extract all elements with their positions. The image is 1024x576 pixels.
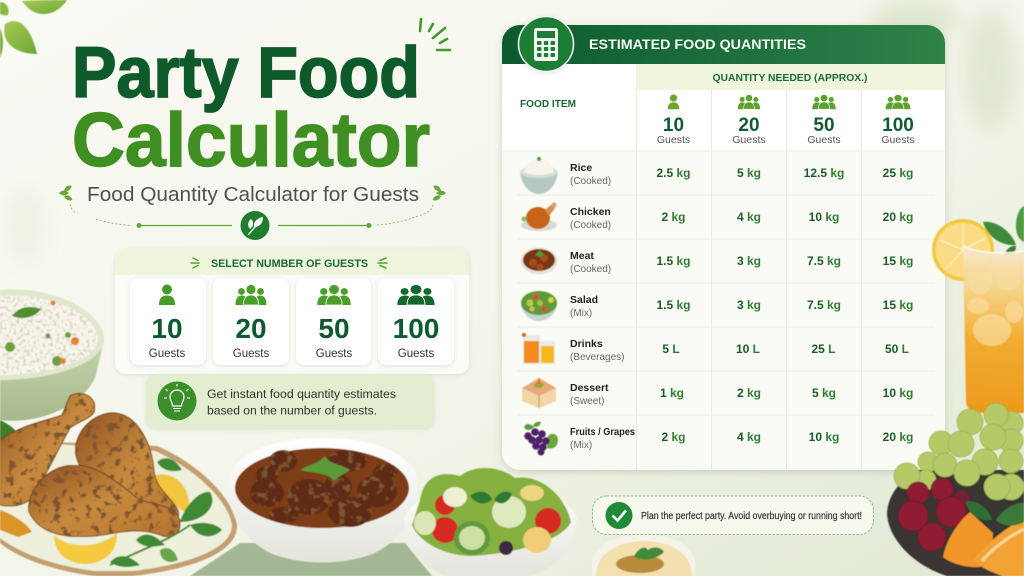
column heading: 20 guests: 20 <box>738 115 760 136</box>
photo: dip bowl <box>592 535 695 576</box>
row: dessert <box>522 377 913 408</box>
table head background <box>502 64 945 151</box>
row: chicken: Chicken <box>570 206 611 218</box>
row: salad: 3 kg <box>737 298 761 312</box>
row: meat: (Cooked) <box>570 264 611 275</box>
row: meat: Meat <box>570 250 594 262</box>
herbs <box>110 492 222 567</box>
title line: Calculator: Calculator <box>72 98 430 183</box>
heading: SELECT NUMBER OF GUESTS <box>211 258 369 270</box>
row: meat: 3 kg <box>737 254 761 268</box>
column heading: 20 guests <box>732 95 766 146</box>
icon: drinks <box>522 333 555 364</box>
column heading: 100 guests: Guests <box>881 134 915 146</box>
icon: light bulb <box>158 382 196 420</box>
card: 100 guests: Guests <box>398 348 434 360</box>
icon: rice bowl <box>520 157 558 194</box>
row: chicken: 10 kg <box>809 210 839 224</box>
row: chicken <box>521 202 913 231</box>
row: salad <box>521 291 913 321</box>
herbs back <box>157 458 182 471</box>
icon: calculator badge <box>518 16 574 72</box>
mint <box>966 501 992 520</box>
row: rice: 25 kg <box>883 166 913 180</box>
row: rice: 5 kg <box>737 166 761 180</box>
callout: plan the perfect party <box>592 496 874 534</box>
drumstick back left <box>0 393 95 506</box>
row: dessert: 2 kg <box>737 386 761 400</box>
card: 10 guests: 10 <box>151 313 183 344</box>
subtitle ornament <box>59 184 446 240</box>
row: drinks <box>522 333 909 364</box>
card: 100 guests <box>378 278 454 365</box>
icon: grapes <box>524 422 558 456</box>
column heading: food item: FOOD ITEM <box>520 99 576 110</box>
column heading: 20 guests: Guests <box>732 134 766 146</box>
row: rice: 2.5 kg <box>656 166 691 180</box>
photo: fruit bowl <box>887 403 1024 576</box>
card: 50 guests: 50 <box>318 313 350 344</box>
tip box <box>146 374 434 428</box>
row: salad: Salad <box>570 294 598 306</box>
row: meat: 15 kg <box>883 254 913 268</box>
panel: estimated food quantities table <box>502 16 945 470</box>
row: meat: 1.5 kg <box>656 254 691 268</box>
photo: salad bowl <box>404 468 577 576</box>
row: dessert: Dessert <box>570 382 609 394</box>
row: chicken: 20 kg <box>883 210 913 224</box>
lemon slices <box>54 533 117 564</box>
row: fruits: 10 kg <box>809 430 839 444</box>
row: drinks: 10 L <box>736 342 760 356</box>
drumstick back right <box>75 413 179 536</box>
row: meat <box>520 248 913 275</box>
row: fruits: 20 kg <box>883 430 913 444</box>
row: drinks: 50 L <box>885 342 909 356</box>
sub heading band <box>636 64 945 90</box>
lemon slice <box>932 219 994 281</box>
icon: dessert <box>522 377 556 408</box>
row: rice <box>520 157 913 194</box>
card: 50 guests: Guests <box>316 348 352 360</box>
column heading: 10 guests: 10 <box>663 115 684 136</box>
icon: check mark <box>606 502 632 529</box>
row: fruits <box>524 422 913 456</box>
icon: corner leaves <box>0 0 67 58</box>
callout text: Plan the perfect party. Avoid overbuying or running short! <box>641 511 862 522</box>
card: 20 guests <box>213 278 289 365</box>
row: chicken: (Cooked) <box>570 220 611 231</box>
column heading: 50 guests <box>807 95 841 146</box>
card: 50 guests <box>296 278 371 365</box>
tip text: Get instant food quantity estimates <box>207 387 396 401</box>
row: dessert: (Sweet) <box>570 396 604 407</box>
row: fruits: Fruits / Grapes <box>570 426 635 438</box>
title line: Party Food: Party Food <box>72 34 420 113</box>
icon: leaf emblem <box>240 211 270 240</box>
row: salad: 7.5 kg <box>807 298 841 312</box>
column heading: 50 guests: Guests <box>807 134 841 146</box>
row: meat: 7.5 kg <box>807 254 841 268</box>
row: dessert: 5 kg <box>812 386 836 400</box>
icon: salad bowl <box>521 291 557 321</box>
column heading: 50 guests: 50 <box>813 115 835 136</box>
row: salad: (Mix) <box>570 308 592 319</box>
column heading: 10 guests: Guests <box>657 134 690 146</box>
blurred background foliage <box>5 0 1016 265</box>
photo: chicken platter <box>0 393 237 576</box>
icon: meat curry <box>520 248 558 274</box>
photo: glass of juice <box>932 206 1024 413</box>
column heading: 100 guests <box>881 95 915 146</box>
mint leaves <box>983 222 1016 245</box>
red grapes <box>898 478 970 551</box>
card: 20 guests: Guests <box>233 348 269 360</box>
row: drinks: Drinks <box>570 338 603 350</box>
icon: heading ticks <box>191 258 387 268</box>
icon: sparkle ticks <box>420 19 450 50</box>
row: dessert: 1 kg <box>660 386 684 400</box>
tip box: based on the number of guests. <box>207 404 377 418</box>
icon: chicken <box>521 202 557 231</box>
row: dessert: 10 kg <box>883 386 913 400</box>
photo: cloth <box>190 543 432 576</box>
panel: select number of guests <box>115 249 469 374</box>
row: chicken: 4 kg <box>737 210 761 224</box>
row: rice: (Cooked) <box>570 176 611 187</box>
row: salad: 1.5 kg <box>656 298 691 312</box>
glass <box>963 246 1024 413</box>
card: 10 guests: Guests <box>149 348 185 360</box>
lemon wedge <box>153 474 189 514</box>
photo: meat curry bowl <box>228 438 418 562</box>
column heading: 100 guests: 100 <box>882 115 914 136</box>
row: fruits: 2 kg <box>661 430 686 444</box>
heading: ESTIMATED FOOD QUANTITIES <box>589 37 806 52</box>
sub heading band: QUANTITY NEEDED (APPROX.) <box>712 72 868 84</box>
drumstick front <box>28 465 180 537</box>
title <box>72 19 450 183</box>
column heading: 10 guests <box>657 94 690 146</box>
card: 20 guests: 20 <box>235 313 267 344</box>
row: drinks: 5 L <box>662 342 680 356</box>
row: drinks: (Beverages) <box>570 352 624 363</box>
herb garnish left <box>0 420 17 445</box>
card: 10 guests <box>130 278 206 365</box>
subtitle: Food Quantity Calculator for Guests <box>87 184 419 206</box>
row: rice: Rice <box>570 162 592 174</box>
row: drinks: 25 L <box>811 342 836 356</box>
row: salad: 15 kg <box>883 298 913 312</box>
card: 100 guests: 100 <box>393 313 439 344</box>
row: rice: 12.5 kg <box>804 166 844 180</box>
row: fruits: 4 kg <box>737 430 761 444</box>
green grapes <box>894 403 1024 500</box>
photo: rice bowl <box>0 289 104 421</box>
orange wedges <box>943 512 993 567</box>
row: chicken: 2 kg <box>661 210 686 224</box>
row: fruits: (Mix) <box>570 440 592 451</box>
table header bar <box>502 25 945 64</box>
